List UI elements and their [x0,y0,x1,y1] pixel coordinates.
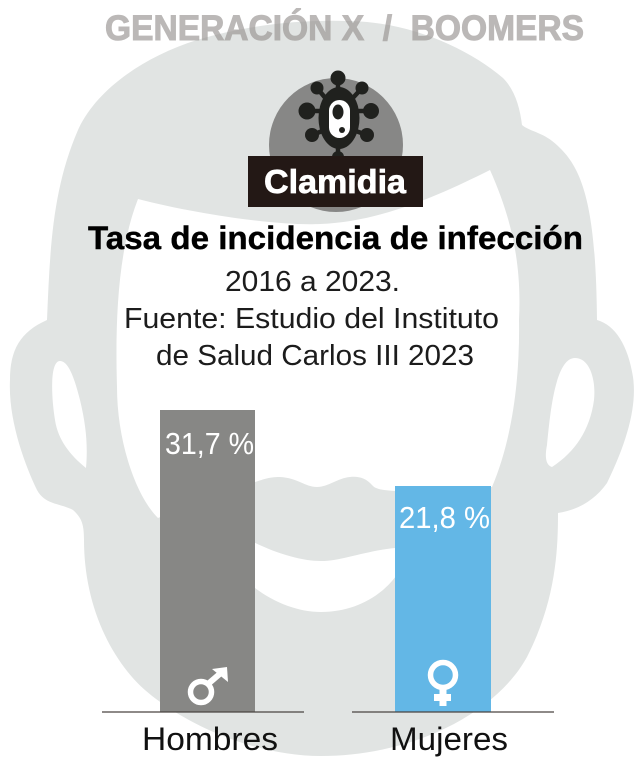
value: Hombres: 31,7 % [165,426,254,461]
source text: de Salud Carlos III 2023 [156,340,474,372]
label: Clamidia: Clamidia [264,163,407,200]
source text: 2016 a 2023. [225,266,400,298]
axis label: Mujeres: Mujeres [390,721,508,757]
icon: chlamydia bacterium badge [269,70,403,212]
label: Clamidia [248,156,423,207]
heading: Tasa de incidencia de infección [88,220,583,256]
value: Mujeres: 21,8 % [399,500,490,535]
bacterium spikes [298,70,379,163]
icon: male symbol [190,667,228,702]
axis label: Hombres: Hombres [142,721,278,757]
baseline: Hombres [102,711,304,713]
bacterium nucleus [332,104,344,120]
bacterium interior [329,100,350,138]
icon background circle [269,78,403,212]
source text: Fuente: Estudio del Instituto [124,303,499,335]
baseline: Mujeres [352,711,554,713]
bar: Hombres [160,410,255,712]
bar: Mujeres [395,486,491,712]
source text [124,266,499,372]
bacterium body [318,87,360,149]
icon: female symbol [430,662,456,706]
title: generation: GENERACIÓN X / BOOMERS [105,8,584,48]
bacterium small dot [339,127,345,133]
